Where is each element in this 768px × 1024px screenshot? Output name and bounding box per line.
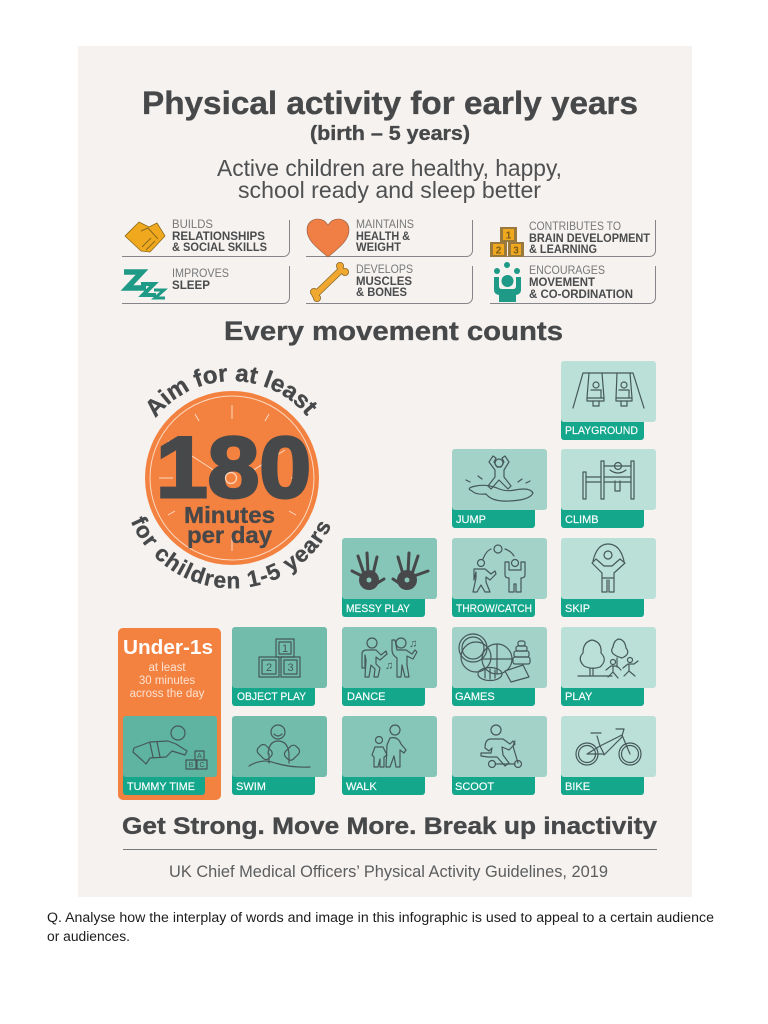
tile: dance: ♫ (385, 660, 393, 672)
tile: tummy time: TUMMY TIME (127, 781, 195, 793)
tile: object play (232, 627, 327, 706)
title: Physical activity for early years (142, 85, 638, 121)
tile: throw and catch (452, 538, 547, 617)
tile: tummy time: A (197, 753, 202, 760)
tile: walk: WALK (346, 781, 377, 793)
tile: object play: 2 (266, 662, 272, 674)
icon: number blocks: 3 (513, 246, 519, 256)
tile: scoot: SCOOT (455, 781, 494, 793)
benefit: relationships: RELATIONSHIPS (172, 231, 265, 243)
tile: bike: BIKE (565, 781, 590, 793)
benefit: brain development: & LEARNING (529, 244, 597, 256)
tile: games (452, 627, 547, 706)
benefit: muscles and bones: DEVELOPS (356, 264, 413, 276)
clock badge: 180 minutes: Aim for at least (148, 367, 317, 418)
tile: scoot (452, 716, 547, 795)
clock badge: 180 minutes: for children 1-5 years (131, 516, 330, 588)
benefit: movement (490, 262, 656, 304)
benefit: movement: & CO-ORDINATION (529, 289, 633, 301)
slogan: Get Strong. Move More. Break up inactivity (122, 813, 657, 840)
tile: tummy time: B (189, 762, 194, 769)
benefit: sleep: IMPROVES (172, 268, 229, 280)
benefit: health and weight (306, 219, 472, 257)
poster background (78, 46, 692, 897)
heading: every movement counts: Every movement counts (224, 316, 563, 346)
tile: dance: DANCE (347, 691, 386, 703)
clock badge: 180 minutes: Minutes (184, 502, 275, 528)
tile: play: PLAY (565, 691, 593, 703)
intro text: Active children are healthy, happy, (217, 155, 562, 181)
benefit: sleep: SLEEP (172, 280, 210, 292)
tile: jump (452, 449, 547, 528)
tile: skip (561, 538, 656, 617)
question text: or audiences. (47, 929, 130, 944)
icon: number blocks (490, 227, 524, 257)
tile: dance: ♫ (409, 638, 417, 650)
panel: under-1s: at least (148, 662, 186, 674)
tile: messy play: MESSY PLAY (346, 603, 411, 615)
tile: playground: PLAYGROUND (565, 425, 638, 437)
panel: under-1s: 30 minutes (139, 675, 195, 687)
benefit: muscles and bones (306, 262, 472, 304)
intro text (217, 155, 562, 203)
benefit: movement: ENCOURAGES (529, 265, 605, 277)
panel: under-1s (118, 628, 221, 800)
benefit: relationships (122, 219, 290, 256)
tile: dance (342, 627, 437, 706)
tile: throw and catch: THROW/CATCH (456, 603, 532, 615)
benefit: sleep (122, 266, 290, 304)
tile: object play: OBJECT PLAY (237, 691, 307, 703)
icon: handshake (125, 222, 165, 252)
benefit: relationships: BUILDS (172, 219, 213, 231)
source line: UK Chief Medical Officers’ Physical Activity Guidelines, 2019 (169, 863, 608, 881)
tile: playground (561, 361, 656, 440)
benefit: health and weight: MAINTAINS (356, 219, 414, 231)
clock badge: 180 minutes: per day (187, 522, 272, 548)
tile: jump: JUMP (456, 514, 486, 526)
subtitle: (birth – 5 years) (310, 123, 470, 145)
tile: climb (561, 449, 656, 528)
icon: bone (310, 262, 349, 302)
benefit: health and weight: WEIGHT (356, 242, 401, 254)
tile: climb: CLIMB (565, 514, 599, 526)
tile: object play: 1 (282, 643, 288, 655)
benefit: health and weight: HEALTH & (356, 231, 410, 243)
panel: under-1s: across the day (130, 688, 205, 700)
tile: swim (232, 716, 327, 795)
tile: walk (342, 716, 437, 795)
tile: swim: SWIM (236, 781, 266, 793)
benefit: relationships: & SOCIAL SKILLS (172, 242, 267, 254)
tile: tummy time (123, 716, 217, 795)
tile: tummy time: C (199, 762, 205, 769)
icon: Zzz (124, 272, 165, 298)
tile: object play: 3 (287, 662, 294, 674)
question text: Q. Analyse how the interplay of words and image in this infographic is used to appeal to a certain audience (47, 910, 714, 925)
benefit: movement: MOVEMENT (529, 277, 595, 289)
tile: messy play (342, 538, 437, 617)
tile: bike (561, 716, 656, 795)
question text (47, 910, 714, 944)
tile: games: GAMES (455, 691, 495, 703)
benefit: muscles and bones: MUSCLES (356, 276, 412, 288)
panel: under-1s: Under-1s (123, 637, 213, 659)
clock badge: 180 minutes: 180 (156, 420, 311, 516)
benefit: brain development: BRAIN DEVELOPMENT (529, 233, 650, 245)
icon: number blocks: 2 (496, 246, 502, 256)
icon: heart (307, 219, 349, 257)
tile: play (561, 627, 656, 706)
intro text: school ready and sleep better (238, 177, 541, 203)
benefit: brain development (490, 220, 656, 257)
clock badge: 180 minutes (131, 367, 330, 588)
tile: skip: SKIP (565, 603, 590, 615)
icon: number blocks: 1 (506, 230, 512, 242)
benefit: brain development: CONTRIBUTES TO (529, 221, 621, 233)
benefit: muscles and bones: & BONES (356, 287, 407, 299)
icon: child with balls (494, 262, 521, 302)
